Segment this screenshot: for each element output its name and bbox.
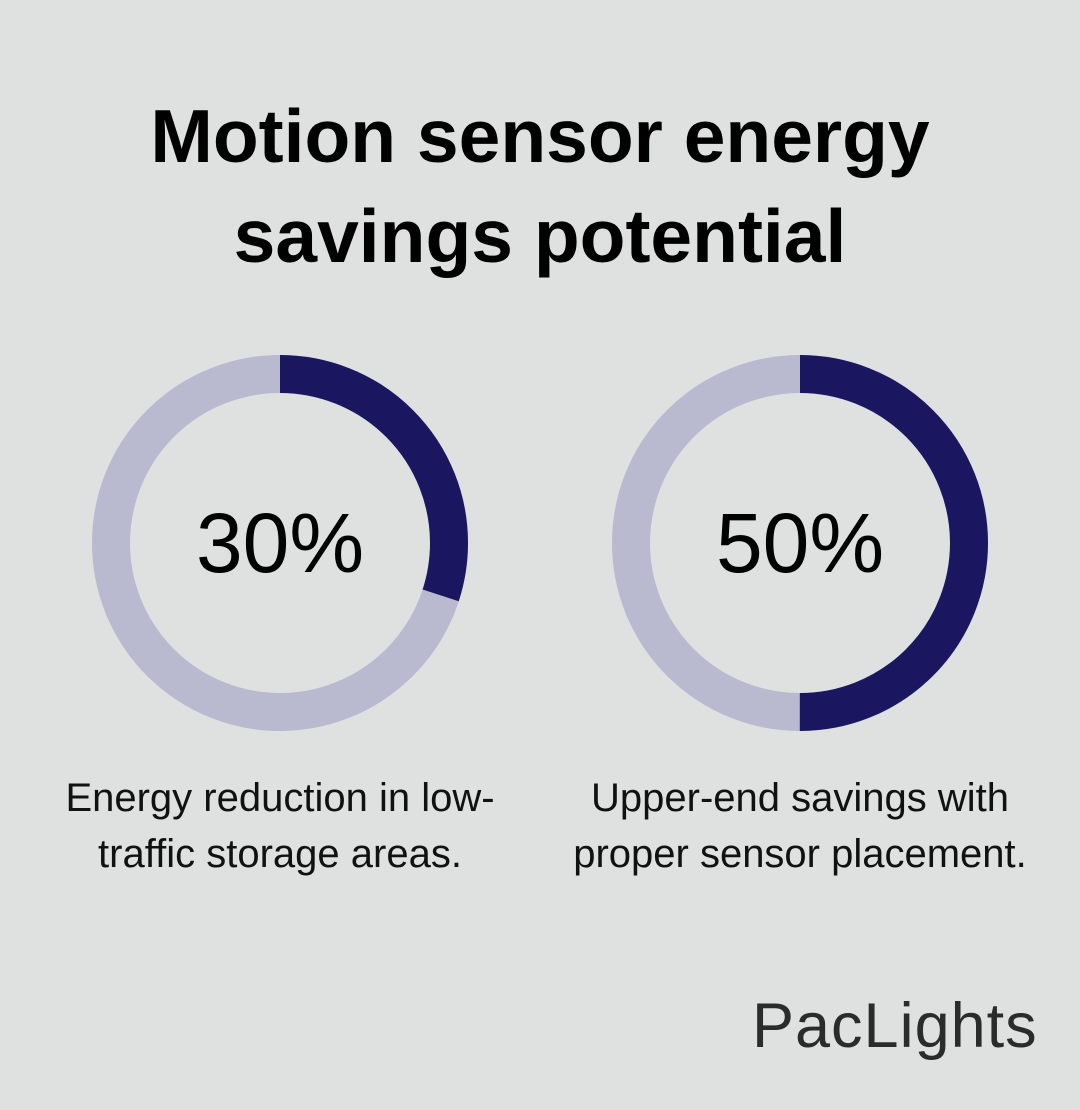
donut chart: 50%: [612, 355, 988, 731]
value: 30%: 30%: [196, 496, 364, 590]
title: Motion sensor energy: [150, 94, 930, 178]
caption: 50%: proper sensor placement.: [573, 832, 1027, 876]
caption: 50%: [573, 776, 1027, 876]
caption: 30%: Energy reduction in low-: [65, 776, 495, 820]
donut chart: 30%: [92, 355, 468, 731]
caption: 50%: Upper-end savings with: [591, 776, 1009, 820]
caption: 30%: [65, 776, 495, 876]
title: [150, 94, 930, 278]
logo: PacLights: [752, 991, 1038, 1061]
title: savings potential: [234, 194, 846, 278]
caption: 30%: traffic storage areas.: [98, 832, 462, 876]
value: 50%: 50%: [716, 496, 884, 590]
